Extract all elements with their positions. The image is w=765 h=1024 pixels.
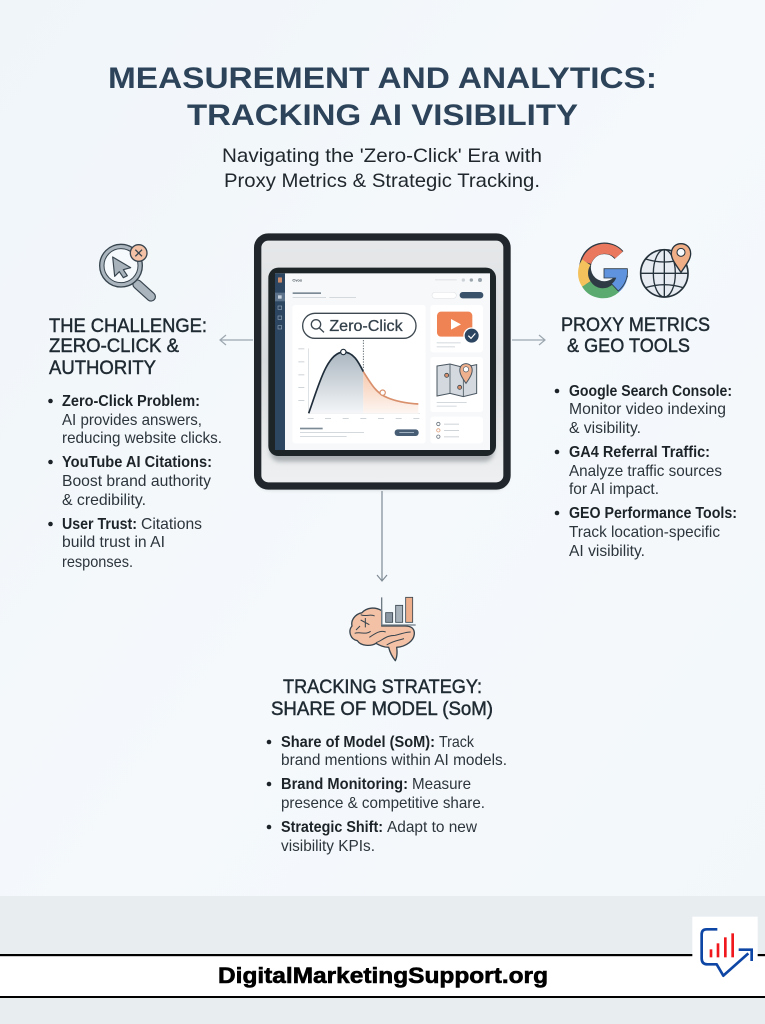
logo: chat bubble with bars and arrow: [692, 917, 758, 990]
bullet list: tracking strategy: Track: [439, 734, 475, 751]
bullet list: proxy metrics: Analyze traffic sources: [569, 463, 722, 480]
icon: google G and globe with pin: [583, 244, 691, 297]
arrow: tablet to proxy metrics: [512, 335, 545, 345]
heading: tracking strategy: [271, 677, 493, 720]
arrow: tablet to tracking strategy: [377, 491, 387, 581]
bullet list: the challenge: YouTube AI Citations:: [62, 454, 212, 471]
icon: magnifier with cursor and x badge: [100, 244, 151, 297]
central tablet dashboard illustration: [257, 237, 507, 489]
heading: the challenge: THE CHALLENGE:: [49, 316, 207, 337]
bullet list: the challenge: Boost brand authority: [62, 473, 211, 490]
bullet list: tracking strategy: presence & competitive share.: [281, 795, 485, 812]
heading: the challenge: AUTHORITY: [49, 358, 156, 379]
heading: the challenge: ZERO-CLICK &: [49, 336, 179, 357]
bullet list: tracking strategy: Adapt to new: [387, 819, 477, 836]
bullet list: proxy metrics: Google Search Console:: [569, 383, 732, 400]
subtitle: [222, 145, 542, 192]
icon: brain with bar chart: [350, 597, 416, 661]
top bar: Cvos: [292, 277, 303, 282]
bullet list: proxy metrics: Track location-specific: [569, 524, 720, 541]
heading: proxy metrics: PROXY METRICS: [561, 315, 710, 336]
bullet list: proxy metrics: [555, 383, 737, 560]
map card: [430, 357, 483, 412]
bullet list: the challenge: reducing website clicks.: [62, 430, 222, 447]
heading: the challenge: [49, 316, 207, 379]
inner tablet: [268, 268, 496, 456]
bullet list: the challenge: [48, 393, 222, 571]
footer url: DigitalMarketingSupport.org: [218, 963, 548, 988]
Zero-Click search pill: Zero-Click: [329, 318, 403, 335]
bullet list: proxy metrics: GEO Performance Tools:: [569, 505, 737, 522]
subtitle: Navigating the 'Zero-Click' Era with: [222, 145, 542, 167]
title: TRACKING AI VISIBILITY: [187, 99, 578, 132]
bullet list: the challenge: responses.: [62, 554, 133, 571]
footer band: [0, 896, 765, 1024]
main chart card: [292, 305, 426, 443]
bullet list: tracking strategy: Share of Model (SoM):: [281, 734, 435, 751]
heading: proxy metrics: & GEO TOOLS: [567, 336, 690, 357]
bullet list: tracking strategy: [267, 734, 507, 855]
bullet list: the challenge: & credibility.: [62, 492, 146, 509]
title: MEASUREMENT AND ANALYTICS:: [108, 62, 657, 95]
top bar: [292, 277, 483, 298]
bullet list: proxy metrics: & visibility.: [569, 420, 641, 437]
video card: [430, 305, 483, 352]
bullet list: tracking strategy: Strategic Shift:: [281, 819, 383, 836]
bullet list: the challenge: AI provides answers,: [62, 412, 202, 429]
bullet list: the challenge: User Trust:: [62, 516, 137, 533]
bullet list: the challenge: Citations: [141, 516, 202, 533]
title: [108, 62, 657, 132]
bullet list: tracking strategy: Measure: [412, 776, 471, 793]
bullet list: the challenge: build trust in AI: [62, 534, 165, 551]
arrow: tablet to challenge: [220, 335, 253, 345]
bullet list: proxy metrics: GA4 Referral Traffic:: [569, 444, 710, 461]
heading: tracking strategy: SHARE OF MODEL (SoM): [271, 699, 493, 720]
outer device frame: [258, 237, 507, 486]
bullet list: tracking strategy: Brand Monitoring:: [281, 776, 408, 793]
bullet list: the challenge: Zero-Click Problem:: [62, 393, 200, 410]
heading: tracking strategy: TRACKING STRATEGY:: [283, 677, 482, 698]
heading: proxy metrics: [561, 315, 710, 357]
bullet list: proxy metrics: AI visibility.: [569, 543, 645, 560]
sidebar: [275, 273, 285, 450]
list card: [430, 417, 483, 443]
bullet list: proxy metrics: Monitor video indexing: [569, 401, 726, 418]
bullet list: tracking strategy: brand mentions within AI models.: [281, 752, 507, 769]
Zero-Click search pill: [303, 313, 416, 338]
subtitle: Proxy Metrics & Strategic Tracking.: [224, 170, 540, 192]
bullet list: tracking strategy: visibility KPIs.: [281, 838, 375, 855]
bullet list: proxy metrics: for AI impact.: [569, 481, 659, 498]
